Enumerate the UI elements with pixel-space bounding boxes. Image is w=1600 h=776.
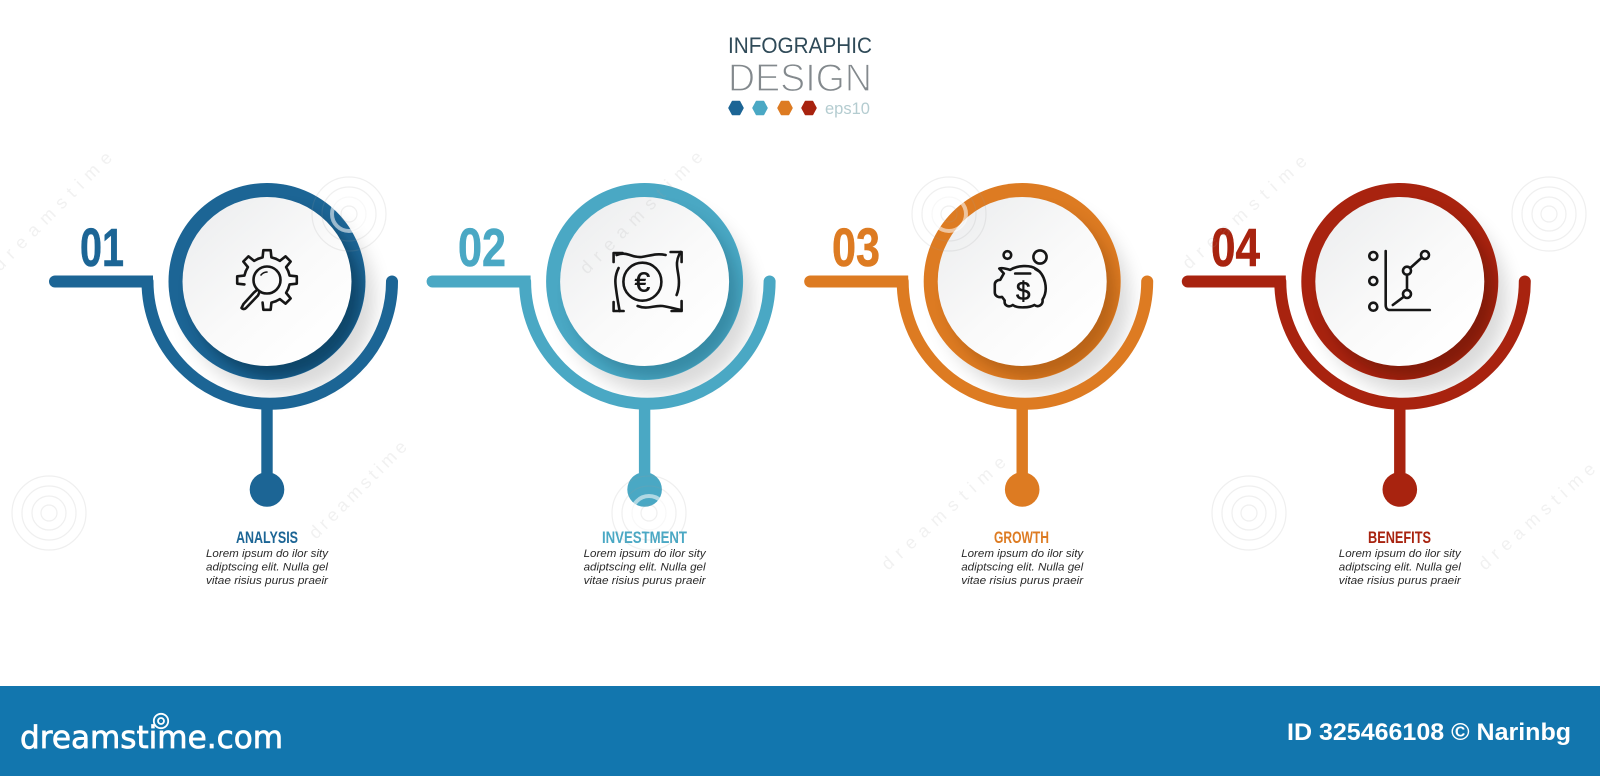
watermark overlay: dreamstime [1178,151,1311,273]
icon: euro coin with arrows [614,252,682,311]
icon: brand spiral [154,714,168,728]
description text [1339,548,1462,587]
ring [924,183,1121,380]
stem and dot [1005,405,1040,507]
ring [1301,183,1498,380]
description text: vitae risius purus praeir [961,575,1085,587]
disc shadow [1318,204,1508,394]
description text: vitae risius purus praeir [1339,575,1462,587]
connector bar and arc [804,276,1147,404]
footer banner [0,686,1600,776]
watermark overlay [0,147,1599,574]
watermark overlay: dreamstime [1474,459,1599,574]
watermark overlay: dreamstime [576,147,707,278]
stem and dot [250,405,284,507]
ring [546,183,743,380]
icon: line chart [1369,251,1430,311]
white disc [1315,197,1484,366]
description text: adiptscing elit. Nulla gel [584,562,706,574]
label: growth: GROWTH [994,529,1049,547]
number 02: 02 [458,218,506,278]
description text [961,548,1085,587]
white disc [938,197,1107,366]
watermark overlay: dreamstime [877,452,1010,574]
description text: Lorem ipsum do ilor sity [584,548,707,560]
description text: adiptscing elit. Nulla gel [961,562,1084,574]
description text [584,548,707,587]
title: infographic: INFOGRAPHIC [728,33,872,58]
white disc [182,197,352,366]
number 01: 01 [80,218,124,278]
icon: euro coin with arrows: € [635,266,651,298]
description text: Lorem ipsum do ilor sity [961,548,1085,560]
step 1: analysis [49,183,392,587]
description text [206,548,330,587]
description text: Lorem ipsum do ilor sity [1339,548,1462,560]
connector bar and arc [427,276,770,404]
label: benefits: BENEFITS [1368,529,1431,547]
stem and dot [1382,405,1417,507]
number 04: 04 [1211,218,1260,278]
stem and dot [627,405,662,507]
icon: gear with magnifier [237,250,297,310]
image id and credit: ID 325466108 © Narinbg [1287,719,1571,746]
description text: vitae risius purus praeir [584,575,707,587]
disc shadow [940,204,1130,394]
eps10 label: eps10 [825,99,870,118]
icon: piggy bank with coins [995,250,1047,307]
description text: adiptscing elit. Nulla gel [206,562,329,574]
title: design: DESIGN [728,57,872,100]
brand name: dreamstime.com [20,720,283,756]
label: analysis: ANALYSIS [236,529,298,547]
connector bar and arc [1182,276,1525,404]
step 3: growth [804,183,1147,587]
title block [728,33,872,118]
label: investment: INVESTMENT [602,529,687,547]
connector bar and arc [49,276,392,404]
number 03: 03 [832,218,880,278]
description text: Lorem ipsum do ilor sity [206,548,330,560]
white disc [560,197,729,366]
ring [168,183,366,380]
hexagon colour dots [729,102,816,114]
disc shadow [563,204,753,394]
description text: vitae risius purus praeir [206,575,329,587]
disc shadow [185,204,375,394]
watermark overlay: dreamstime [305,437,411,543]
icon: piggy bank with coins: $ [1016,276,1031,306]
step 2: investment [427,183,770,587]
step 4: benefits [1182,183,1525,587]
description text: adiptscing elit. Nulla gel [1339,562,1461,574]
